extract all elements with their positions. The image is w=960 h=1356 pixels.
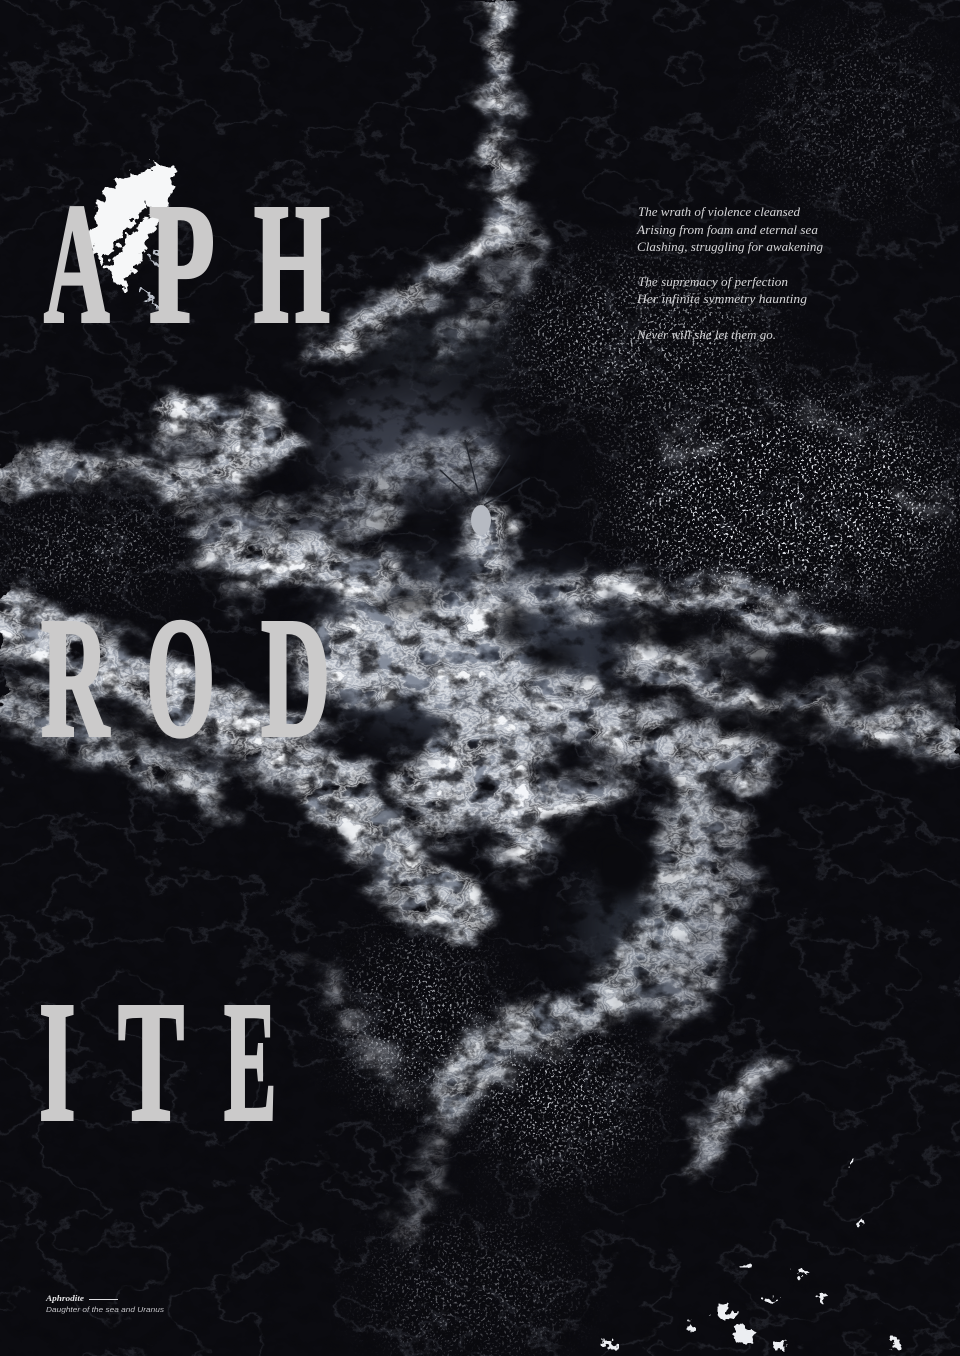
title line 3: ITE: T [118, 967, 184, 1157]
title line 1: APH [44, 169, 330, 359]
lower right white specks [604, 1158, 901, 1349]
title line 1: APH: A [44, 169, 109, 358]
dark gaps in the foam [110, 586, 830, 898]
title line 3: ITE: I [39, 967, 76, 1156]
title line 2: ROD: D [261, 583, 330, 772]
title line 2: ROD [41, 583, 330, 773]
title line 2: ROD: O [146, 584, 215, 773]
upper left white splash [84, 165, 176, 310]
title line 1: APH: H [254, 170, 330, 359]
title line 1: APH: P [149, 169, 215, 358]
title line 3: ITE: E [224, 966, 276, 1156]
caption: Aphrodite [45, 1293, 84, 1303]
caption [45, 1293, 164, 1314]
figure face and rays [440, 440, 530, 535]
title line 3: ITE [39, 966, 276, 1157]
poem: Arising from foam and eternal sea [636, 222, 819, 237]
mid-tone water [320, 320, 720, 1000]
poem: Her infinite symmetry haunting [636, 291, 808, 306]
poem: The wrath of violence cleansed [638, 204, 800, 219]
poem [636, 204, 823, 342]
poem: The supremacy of perfection [638, 274, 788, 289]
poem: Never will she let them go. [636, 327, 776, 342]
caption: Daughter of the sea and Uranus [46, 1305, 164, 1314]
poem: Clashing, struggling for awakening [637, 239, 823, 254]
title line 2: ROD: R [41, 583, 110, 772]
